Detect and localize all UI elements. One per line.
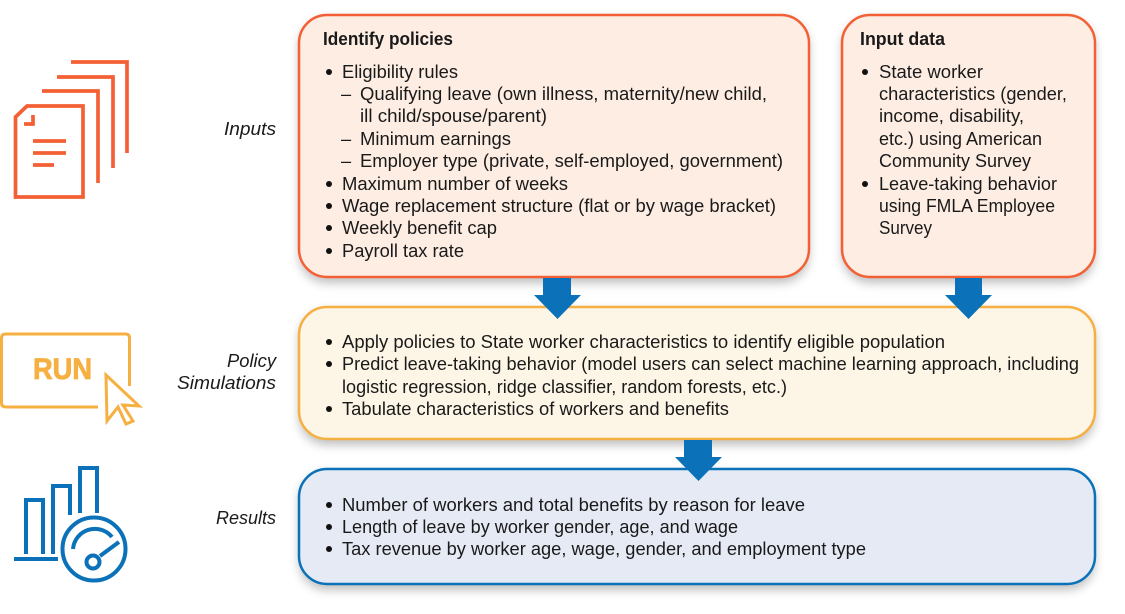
list: input data items: Leave-taking behavior [879,174,1057,194]
list: simulation steps: Apply policies to State worker characteristics to identify eligible population [342,332,945,352]
arrow: input data to simulations [945,278,992,319]
list: result items: Tax revenue by worker age, wage, gender, and employment type [342,539,866,559]
list: simulation steps [326,332,1079,419]
icon: documents [16,62,127,197]
label: results: Results [216,508,276,528]
icon: run button with cursor: RUN [33,353,92,386]
panel: identify policies [299,15,809,283]
panel: policy simulations [299,307,1095,445]
list: input data items [862,62,1067,238]
list: policy items: – [341,129,352,149]
icon: bar chart with gauge [14,468,126,580]
panel: results [299,469,1095,590]
list: policy items: Wage replacement structure (flat or by wage bracket) [342,196,776,216]
icon: run button with cursor [2,334,139,424]
list: simulation steps: Predict leave-taking behavior (model users can select machine learning approach, including [342,354,1079,374]
list: input data items: Community Survey [879,151,1032,171]
list: policy items: Eligibility rules [342,62,458,82]
list: policy items: Minimum earnings [360,129,511,149]
list: policy items: Payroll tax rate [342,241,464,261]
list: result items: Length of leave by worker gender, age, and wage [342,517,738,537]
list: result items [326,495,866,559]
list: policy items: – [341,84,352,104]
list: input data items: income, disability, [879,106,1024,126]
panel: input data [842,15,1095,283]
list: policy items: Qualifying leave (own illness, maternity/new child, [360,84,767,104]
arrow: simulations to results [675,440,722,481]
list: policy items: – [341,151,352,171]
list: policy items: Maximum number of weeks [342,174,568,194]
list: policy items: Employer type (private, self-employed, government) [360,151,783,171]
list: result items: Number of workers and total benefits by reason for leave [342,495,805,515]
label: policy simulations [177,351,278,393]
list: input data items: using FMLA Employee [879,196,1055,216]
list: simulation steps: Tabulate characteristics of workers and benefits [342,399,729,419]
label: policy simulations: Simulations [177,373,276,393]
list: simulation steps: logistic regression, ridge classifier, random forests, etc.) [342,377,787,397]
label: inputs: Inputs [224,119,276,139]
list: input data items: characteristics (gender, [879,84,1067,104]
list: policy items: ill child/spouse/parent) [360,106,547,126]
heading: input data: Input data [860,29,946,49]
label: policy simulations: Policy [227,351,278,371]
list: policy items: Weekly benefit cap [342,218,497,238]
heading: identify policies: Identify policies [323,29,453,49]
list: policy items [326,62,783,261]
list: input data items: Survey [879,218,933,238]
arrow: identify policies to simulations [534,278,581,319]
list: input data items: etc.) using American [879,129,1042,149]
list: input data items: State worker [879,62,983,82]
